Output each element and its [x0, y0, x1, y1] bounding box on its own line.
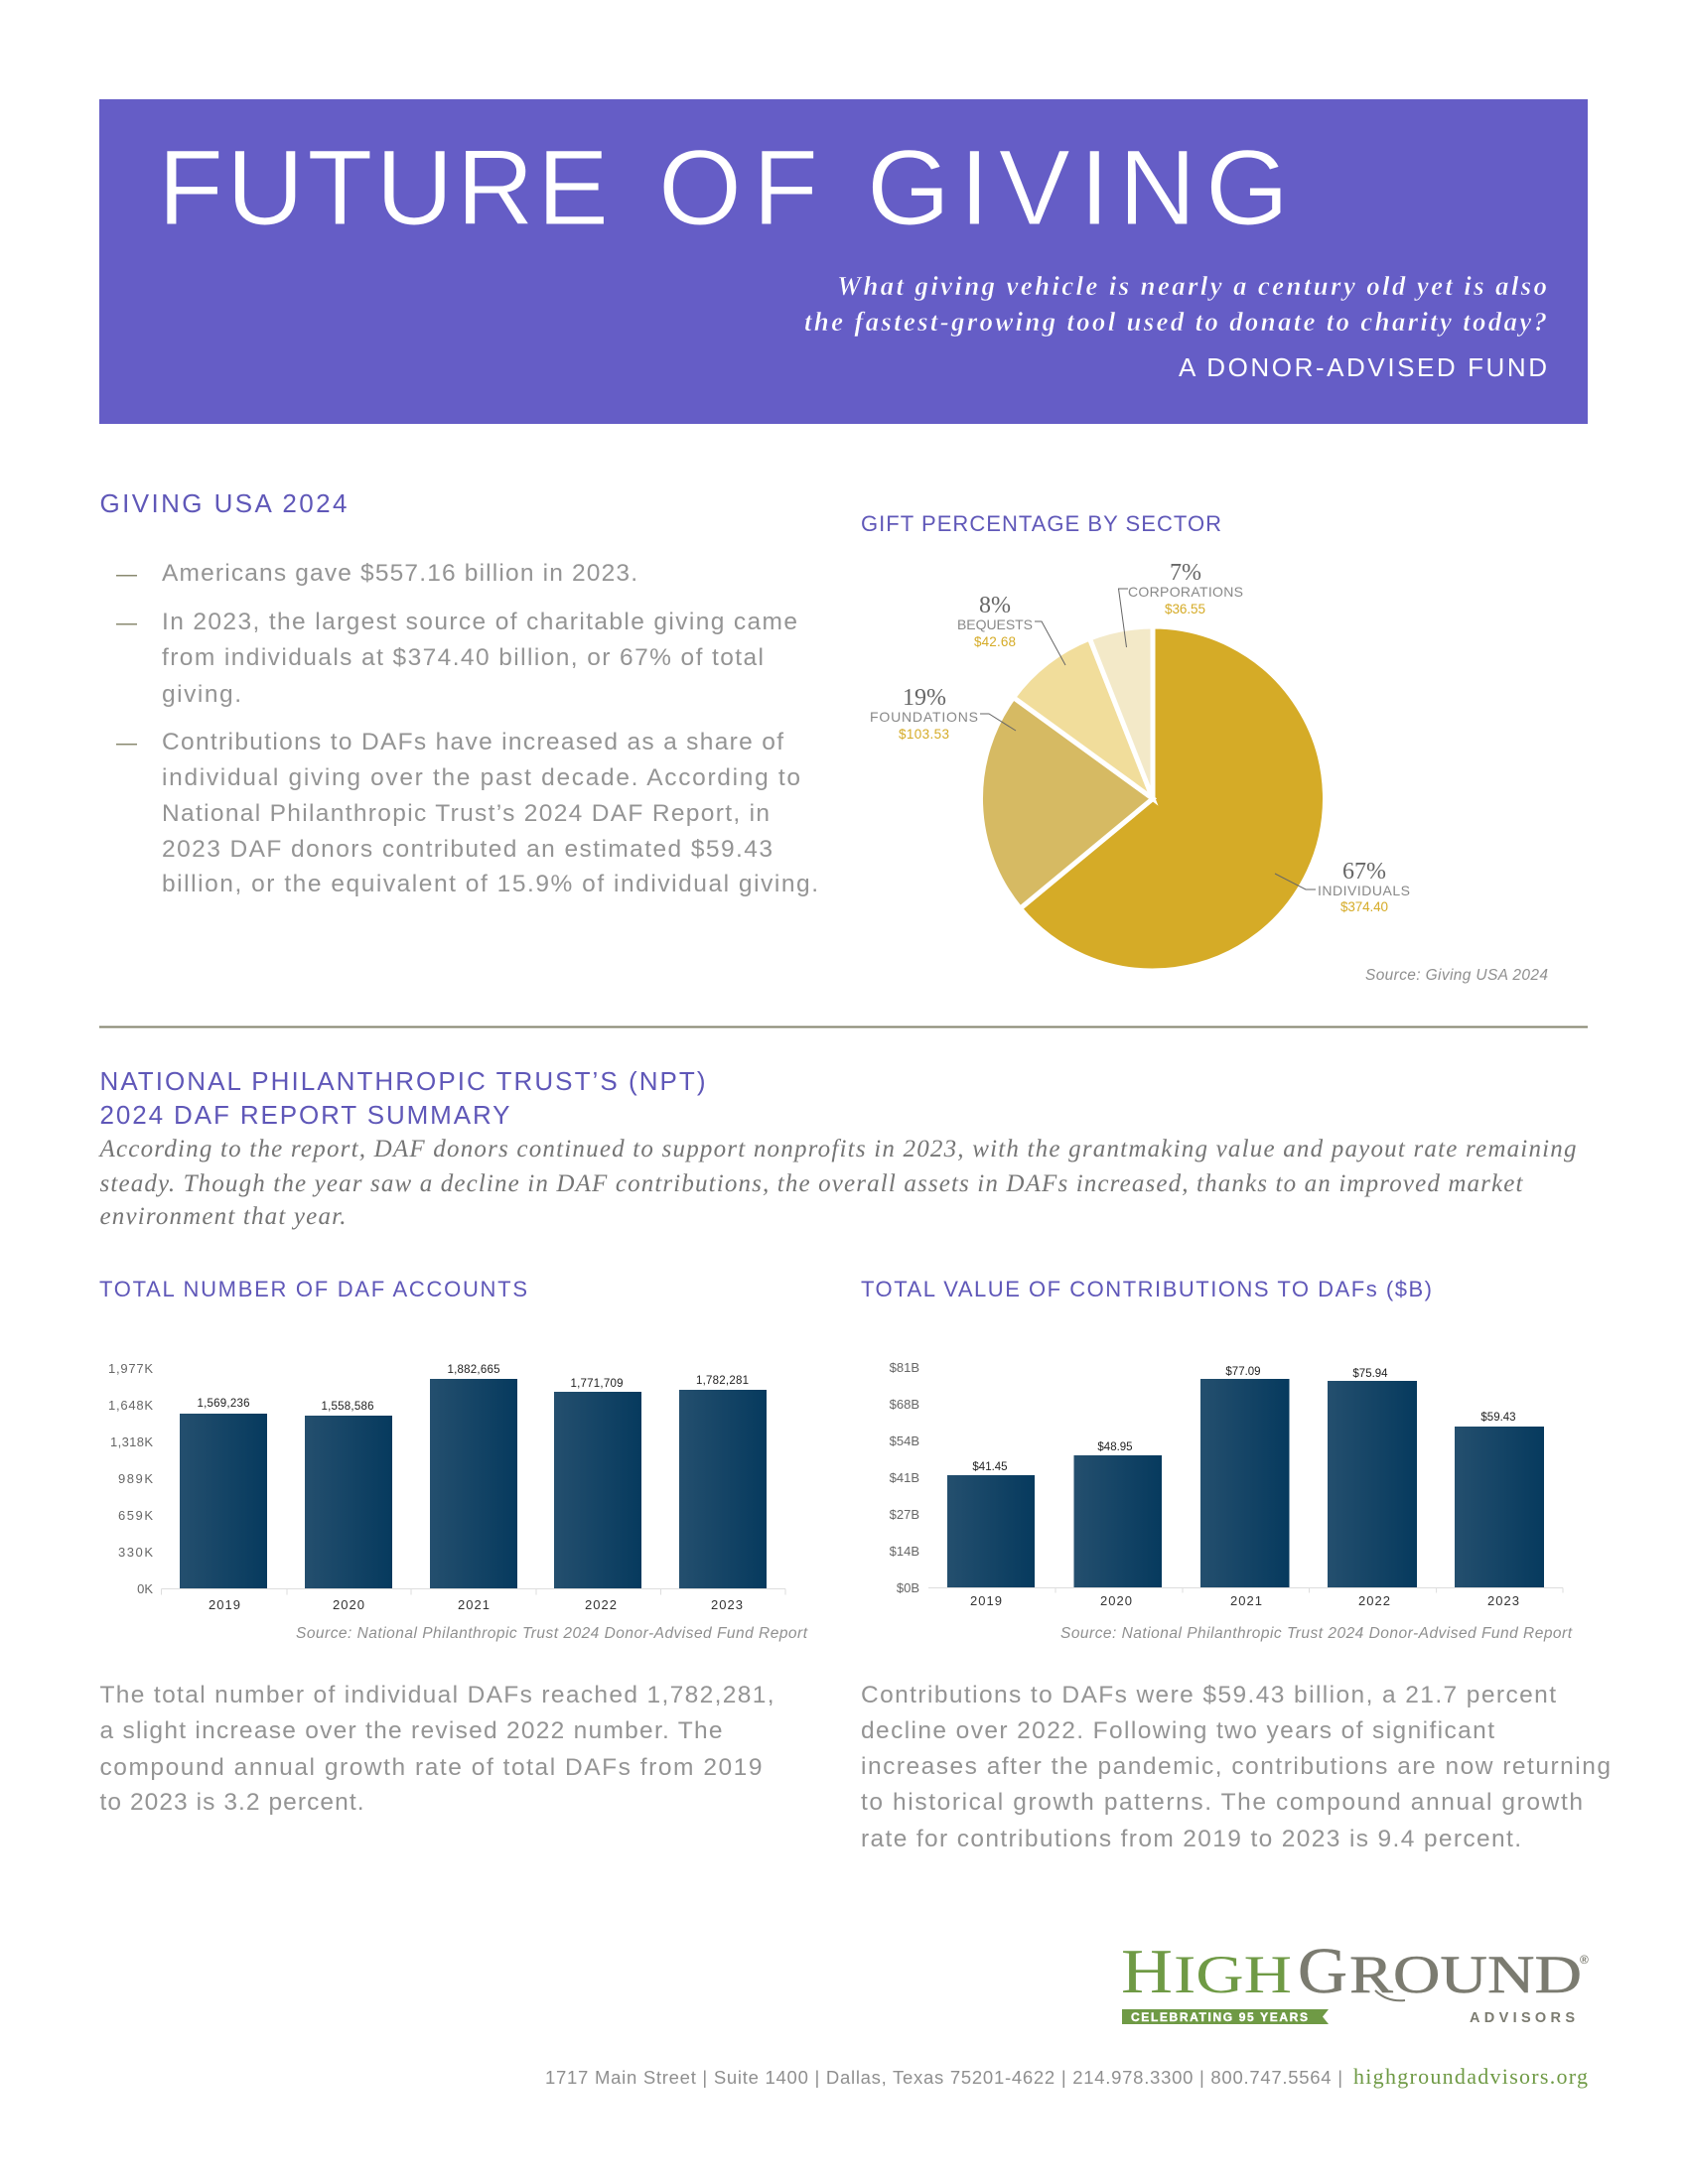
body text — [99, 1682, 774, 1816]
body text: The total number of individual DAFs reached 1,782,281, — [99, 1682, 774, 1708]
logo: HighGround Advisors — [1121, 1935, 1589, 2026]
intro paragraph: steady. Though the year saw a decline in DAF contributions, the overall assets in DAFs increased, thanks to an improved market — [99, 1170, 1524, 1197]
bar chart: accounts: 2023 — [711, 1597, 743, 1612]
bar chart: contributions: $48.95 — [1097, 1441, 1133, 1453]
logo tagline: ADVISORS — [1470, 2010, 1575, 2026]
bullet list: Americans gave $557.16 billion in 2023. — [162, 560, 637, 587]
title: GIVING — [867, 127, 1289, 247]
subtitle answer: A DONOR-ADVISED FUND — [1179, 352, 1547, 382]
pie chart — [980, 626, 1325, 971]
intro paragraph: According to the report, DAF donors continued to support nonprofits in 2023, with the grantmaking value and payout rate remaining — [97, 1136, 1577, 1162]
title: OF — [658, 127, 818, 247]
label: bequests: BEQUESTS — [957, 616, 1033, 632]
footer contact line — [545, 2064, 1588, 2089]
heading: TOTAL VALUE OF CONTRIBUTIONS TO DAFs ($B) — [861, 1277, 1432, 1301]
panel: Giving USA 2024 — [99, 488, 818, 897]
bar chart: contributions: $41B — [890, 1470, 919, 1485]
bar chart: accounts: 1,569,236 — [197, 1398, 250, 1410]
bar chart: contributions: $14B — [890, 1544, 919, 1559]
label: corporations: CORPORATIONS — [1128, 584, 1243, 600]
bar chart: contributions: $77.09 — [1225, 1366, 1261, 1378]
bar chart: contributions: 2023 — [1487, 1593, 1519, 1608]
bar chart: accounts: 1,648K — [108, 1398, 153, 1413]
body text: to historical growth patterns. The compound annual growth — [861, 1789, 1583, 1816]
label: corporations: 7% — [1170, 560, 1201, 586]
panel: total value of contributions — [861, 1277, 1611, 1852]
bar chart: accounts: 1,318K — [110, 1434, 153, 1449]
bar chart: accounts: 0K — [137, 1581, 153, 1596]
label: individuals: $374.40 — [1340, 899, 1388, 914]
bar chart: contributions: $41.45 — [972, 1461, 1008, 1473]
bar chart: accounts: 2020 — [333, 1597, 364, 1612]
bar chart: contributions: 2019 — [970, 1593, 1002, 1608]
bullet list: individual giving over the past decade. According to — [162, 764, 800, 791]
heading — [99, 1066, 705, 1130]
title: FUTURE — [158, 127, 609, 247]
label: foundations — [870, 685, 1016, 742]
bar chart: accounts: 2021 — [458, 1597, 490, 1612]
bar chart: contributions: $0B — [897, 1580, 919, 1595]
label: corporations — [1118, 560, 1243, 647]
logo wordmark — [1121, 1935, 1589, 2007]
logo wordmark: G — [1298, 1935, 1347, 2007]
bar chart: accounts: 659K — [118, 1508, 153, 1523]
bullet list: 2023 DAF donors contributed an estimated $59.43 — [162, 836, 773, 863]
bar chart: accounts: 1,558,586 — [322, 1401, 373, 1413]
bullet list: Contributions to DAFs have increased as a share of — [162, 729, 783, 755]
footer contact line: 1717 Main Street | Suite 1400 | Dallas, Texas 75201-4622 | 214.978.3300 | 800.747.5564 | — [545, 2067, 1342, 2088]
bar chart: contributions: 2020 — [1100, 1593, 1132, 1608]
label: individuals: INDIVIDUALS — [1318, 883, 1410, 898]
bar chart: accounts: 2022 — [585, 1597, 617, 1612]
anniversary ribbon: CELEBRATING 95 YEARS — [1131, 2010, 1308, 2024]
body text: a slight increase over the revised 2022 number. The — [99, 1717, 723, 1744]
panel: title banner — [99, 99, 1588, 424]
body text: Contributions to DAFs were $59.43 billion, a 21.7 percent — [861, 1682, 1556, 1708]
heading: 2024 DAF REPORT SUMMARY — [99, 1100, 510, 1130]
bar chart: contributions: $59.43 — [1480, 1412, 1516, 1424]
label: foundations: FOUNDATIONS — [870, 709, 978, 725]
bullet list: billion, or the equivalent of 15.9% of individual giving. — [162, 871, 818, 897]
bar chart: contributions: $27B — [890, 1507, 919, 1522]
subtitle question: What giving vehicle is nearly a century old yet is also — [837, 271, 1547, 301]
label: bequests: $42.68 — [974, 634, 1016, 649]
bullet list: National Philanthropic Trust’s 2024 DAF Report, in — [162, 800, 770, 827]
bar chart: contributions — [890, 1360, 1563, 1608]
label: bequests — [957, 593, 1065, 665]
label: corporations: $36.55 — [1165, 602, 1205, 616]
bar chart: accounts: 330K — [118, 1545, 153, 1560]
bar chart: accounts: 1,882,665 — [447, 1364, 500, 1376]
bar chart: accounts — [108, 1361, 785, 1612]
label: foundations: 19% — [903, 685, 946, 711]
heading: GIVING USA 2024 — [99, 488, 348, 518]
bar chart: contributions: $81B — [890, 1360, 919, 1375]
panel: NPT report summary — [97, 1066, 1577, 1230]
bar chart: accounts: 989K — [118, 1471, 153, 1486]
title — [158, 127, 1289, 247]
bullet list: In 2023, the largest source of charitable giving came — [162, 609, 797, 635]
intro paragraph — [97, 1136, 1577, 1230]
label: bequests: 8% — [979, 593, 1011, 618]
body text: increases after the pandemic, contributions are now returning — [861, 1753, 1611, 1780]
source note: Source: National Philanthropic Trust 2024 Donor-Advised Fund Report — [1060, 1625, 1573, 1642]
body text: to 2023 is 3.2 percent. — [99, 1789, 363, 1816]
heading: GIFT PERCENTAGE BY SECTOR — [861, 511, 1221, 536]
bar chart: contributions: $54B — [890, 1433, 919, 1448]
logo wordmark: ® — [1580, 1953, 1589, 1967]
body text: compound annual growth rate of total DAFs from 2019 — [99, 1754, 763, 1781]
panel: total number of DAF accounts — [99, 1277, 808, 1816]
bar chart: accounts: 1,782,281 — [696, 1375, 749, 1387]
source note: Source: National Philanthropic Trust 2024 Donor-Advised Fund Report — [296, 1625, 808, 1642]
intro paragraph: environment that year. — [99, 1203, 346, 1230]
panel: gift percentage by sector — [861, 511, 1548, 984]
bar chart: contributions: $68B — [890, 1397, 919, 1412]
bar chart: accounts: 2019 — [209, 1597, 240, 1612]
logo wordmark: H — [1121, 1936, 1173, 2006]
subtitle question: the fastest-growing tool used to donate to charity today? — [804, 307, 1547, 337]
label: individuals — [1275, 859, 1410, 914]
bullet list: giving. — [162, 681, 241, 708]
body text — [861, 1682, 1611, 1852]
label: individuals: 67% — [1342, 859, 1386, 885]
heading: TOTAL NUMBER OF DAF ACCOUNTS — [99, 1277, 527, 1301]
body text: rate for contributions from 2019 to 2023 is 9.4 percent. — [861, 1826, 1521, 1852]
bar chart: contributions: 2021 — [1230, 1593, 1262, 1608]
subtitle question — [804, 271, 1547, 337]
logo wordmark: IGH — [1174, 1945, 1292, 2004]
heading: NATIONAL PHILANTHROPIC TRUST’S (NPT) — [99, 1066, 705, 1096]
source note: Source: Giving USA 2024 — [1365, 967, 1548, 984]
bar chart: contributions: 2022 — [1358, 1593, 1390, 1608]
footer contact line: highgroundadvisors.org — [1353, 2064, 1588, 2089]
bullet list — [116, 560, 818, 897]
logo wordmark: ROUND — [1349, 1945, 1582, 2004]
bar chart: contributions: $75.94 — [1352, 1368, 1388, 1380]
bar chart: accounts: 1,771,709 — [570, 1378, 624, 1390]
bar chart: accounts: 1,977K — [108, 1361, 153, 1376]
body text: decline over 2022. Following two years of significant — [861, 1717, 1494, 1744]
label: foundations: $103.53 — [899, 727, 949, 742]
bullet list: from individuals at $374.40 billion, or 67% of total — [162, 644, 764, 671]
